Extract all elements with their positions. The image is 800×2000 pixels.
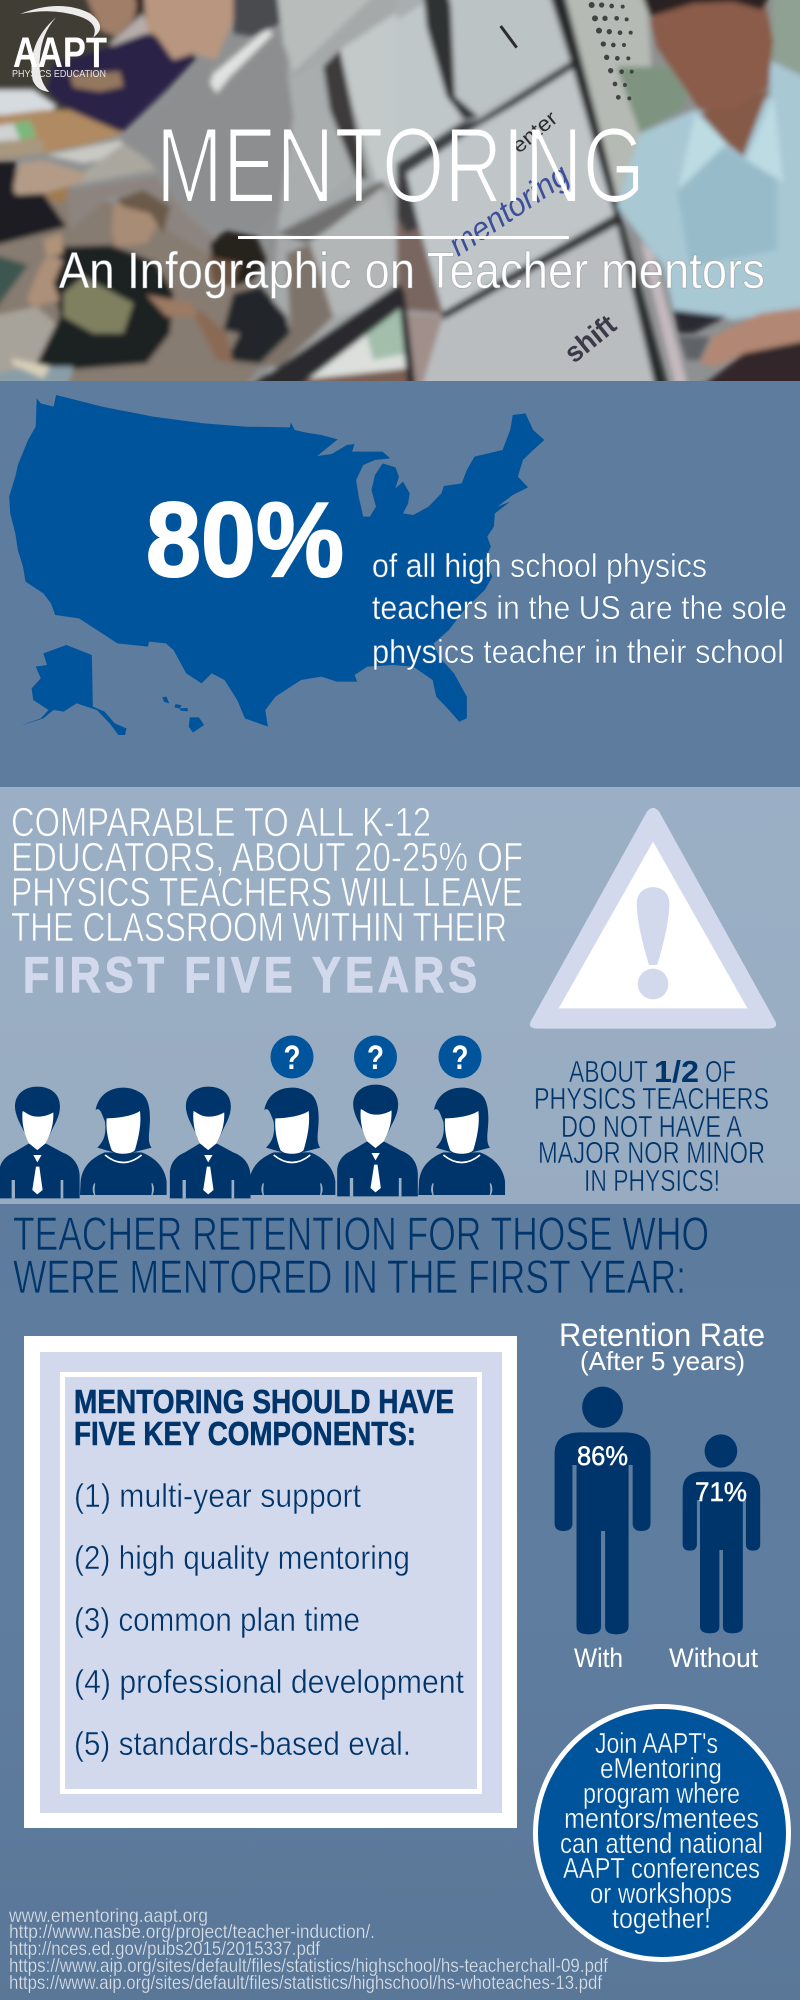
heading: teacher retention (13, 1207, 709, 1303)
callout: join eMentoring: mentors/mentees (564, 1803, 759, 1835)
chart subtitle: (After 5 years) (580, 1346, 745, 1376)
panel: five key components (24, 1336, 517, 1828)
callout: join eMentoring: can attend national (560, 1828, 763, 1860)
list: components: (1) multi-year support (74, 1477, 361, 1514)
callout: join eMentoring (536, 1706, 788, 1960)
text block: sources: http://nces.ed.gov/pubs2015/2015337.pdf (9, 1939, 321, 1960)
person 6 (418, 1088, 505, 1195)
callout: join eMentoring: eMentoring (600, 1753, 722, 1785)
callout: join eMentoring: together! (612, 1903, 711, 1935)
list: components: (2) high quality mentoring (74, 1539, 410, 1576)
text block: sources (8, 1906, 609, 1994)
callout: join eMentoring: AAPT conferences (563, 1853, 760, 1885)
logo: AAPT Physics Education: PHYSICS EDUCATION (12, 69, 106, 80)
logo: AAPT Physics Education: AAPT (13, 29, 107, 77)
heading: teachers leaving: PHYSICS TEACHERS WILL LEAVE (11, 869, 523, 915)
text block: sources: https://www.aip.org/sites/default/files/statistics/highschool/hs-whoteaches-13.pdf (9, 1973, 603, 1994)
list: components: (4) professional development (74, 1663, 464, 1700)
title: MENTORING (156, 105, 645, 225)
heading: teachers leaving: EDUCATORS, ABOUT 20-25% OF (11, 834, 523, 880)
title divider (238, 236, 569, 239)
keycap labels in photo: mentoring (442, 156, 576, 263)
question badge 3: ? (452, 1039, 468, 1077)
chart: retention rate (555, 1317, 765, 1673)
keycap labels in photo: enter (507, 107, 562, 158)
callout: half of physics teachers: IN PHYSICS! (584, 1163, 720, 1198)
question badge 1: ? (284, 1039, 300, 1077)
question badge 2 (354, 1036, 397, 1078)
keycap labels in photo (442, 107, 622, 369)
heading: teachers leaving (11, 799, 523, 950)
callout: half of physics teachers: DO NOT HAVE A (561, 1109, 742, 1144)
panel: teachers leaving and qualifications (0, 787, 800, 1204)
chart title: Retention Rate (559, 1317, 765, 1353)
statistic text (372, 547, 787, 670)
list: components (74, 1477, 464, 1762)
callout: half of physics teachers (534, 1054, 769, 1198)
logo: AAPT Physics Education (12, 6, 107, 92)
label: with: With (574, 1643, 623, 1673)
callout: join eMentoring: or workshops (590, 1878, 732, 1910)
text block: sources: http://www.nasbe.org/project/teacher-induction/. (9, 1922, 375, 1943)
question badge 1 (270, 1036, 314, 1078)
person 2 (80, 1088, 167, 1195)
heading: five key components (74, 1383, 454, 1452)
text block: sources: www.ementoring.aapt.org (8, 1906, 208, 1927)
panel: header photo collage (0, 0, 800, 393)
keycap labels in photo: shift (558, 309, 622, 369)
icon: figure with mentoring (555, 1387, 651, 1634)
emphasis: first five years: FIRST FIVE YEARS (23, 947, 477, 1003)
person 5 (337, 1085, 418, 1196)
icon: six teachers with question marks (0, 1036, 505, 1198)
icon: figure without mentoring (683, 1434, 760, 1633)
value: 71%: 71% (695, 1477, 747, 1507)
person 3 (170, 1087, 251, 1198)
heading: teachers leaving: COMPARABLE TO ALL K-12 (11, 799, 431, 845)
panel: 80 percent statistic (0, 381, 800, 787)
icon: warning triangle (530, 808, 776, 1029)
callout: half of physics teachers: ABOUT (569, 1054, 648, 1089)
list: components: (3) common plan time (74, 1601, 360, 1638)
callout: half of physics teachers: OF (705, 1054, 736, 1089)
person 4 (249, 1088, 335, 1195)
label: without: Without (669, 1643, 758, 1673)
text block: sources: https://www.aip.org/sites/default/files/statistics/highschool/hs-teacherchall-09.pdf (9, 1956, 609, 1977)
callout: half of physics teachers: 1/2 (654, 1054, 699, 1089)
panel: teacher retention (0, 1204, 800, 2000)
map: United States (9, 395, 544, 735)
callout: join eMentoring: Join AAPT's (595, 1728, 718, 1760)
statistic text: of all high school physics (372, 547, 707, 584)
question badge 3 (438, 1036, 482, 1078)
heading: teachers leaving: THE CLASSROOM WITHIN THEIR (11, 904, 507, 950)
value: 86%: 86% (577, 1441, 628, 1471)
heading: five key components: MENTORING SHOULD HAVE (74, 1383, 454, 1420)
question badge 2: ? (367, 1039, 384, 1077)
list: components: (5) standards-based eval. (74, 1725, 411, 1762)
person 1 (0, 1087, 80, 1198)
heading: five key components: FIVE KEY COMPONENTS: (74, 1415, 416, 1452)
callout: join eMentoring: program where (583, 1778, 740, 1810)
big number: 80%: 80% (146, 481, 344, 599)
